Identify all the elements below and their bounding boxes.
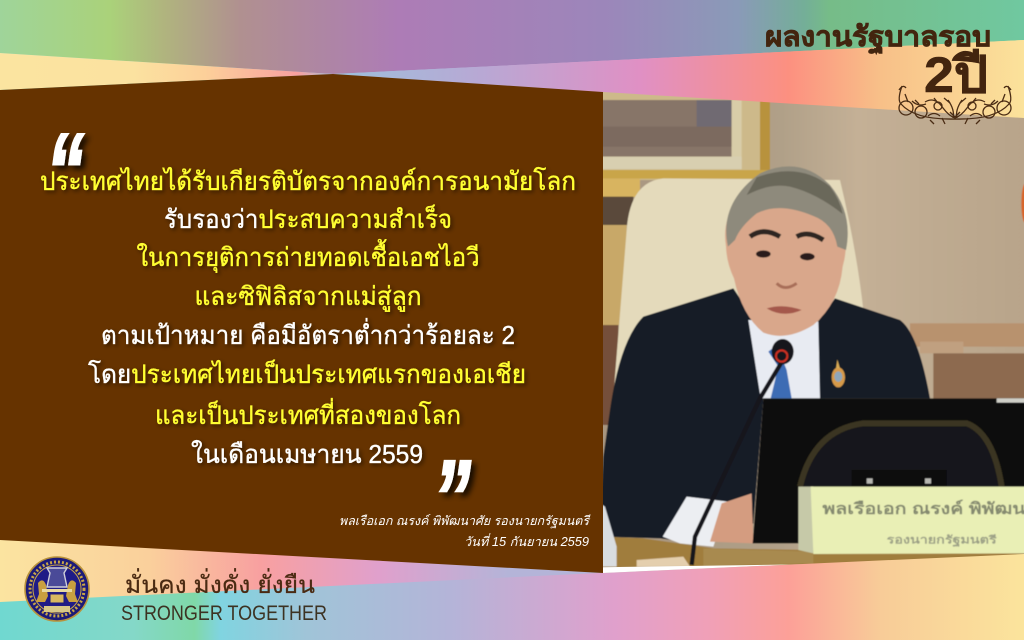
quote text: รับรองว่าประสบความสำเร็จ [164, 204, 452, 234]
quote text: และซิฟิลิสจากแม่สู่ลูก [194, 283, 422, 312]
wall [600, 90, 1024, 577]
suit [600, 288, 930, 543]
slogan english: STRONGER TOGETHER [121, 602, 327, 625]
eyebrows eyes nose mouth [750, 232, 823, 240]
hand and cuff [663, 497, 728, 547]
slogan: มั่นคง มั่งคั่ง ยั่งยืน [125, 568, 315, 599]
slogan [121, 568, 327, 625]
quote text: ประเทศไทยได้รับเกียรติบัตรจากองค์การอนามัยโลก [40, 167, 576, 196]
white photo edge [603, 564, 800, 573]
wooden cabinet [910, 323, 1024, 347]
closing quotation mark: ” [433, 437, 471, 558]
name plate [798, 487, 1024, 554]
quote text: และเป็นประเทศที่สองของโลก [155, 398, 461, 430]
photo: deputy prime minister at a desk [600, 90, 1024, 580]
quote text: ตามเป้าหมาย คือมีอัตราต่ำกว่าร้อยละ 2 [101, 318, 515, 350]
desk [600, 537, 1024, 567]
opening quotation mark: “ [46, 110, 84, 231]
flag hint [1021, 183, 1024, 223]
shirt [748, 320, 820, 398]
attribution: วันที่ 15 กันยายน 2559 [464, 533, 589, 549]
ornament: scrollwork flourish [899, 86, 1011, 124]
monitor [753, 398, 1024, 543]
quote text: ในการยุติการถ่ายทอดเชื้อเอชไอวี [136, 239, 480, 273]
quote text [40, 167, 576, 469]
hair [726, 166, 848, 250]
name plate: รองนายกรัฐมนตรี [887, 533, 997, 547]
attribution [339, 514, 591, 549]
quote text: โดยประเทศไทยเป็นประเทศแรกของเอเชีย [88, 359, 526, 389]
microphone [692, 339, 794, 565]
attribution: พลเรือเอก ณรงค์ พิพัฒนาศัย รองนายกรัฐมนตรี [339, 514, 591, 529]
lapel pin [832, 359, 845, 387]
heading: government results: ผลงานรัฐบาลรอบ [765, 21, 991, 55]
head [725, 193, 846, 336]
heading: 2 years: 2ปี [924, 47, 988, 103]
quote text: ในเดือนเมษายน 2559 [191, 440, 423, 469]
name plate: พลเรือเอก ณรงค์ พิพัฒน [822, 499, 1024, 518]
panel: brown quote panel [0, 74, 603, 573]
chair [614, 178, 864, 386]
framed painting [600, 90, 770, 180]
logo: government seal [25, 557, 89, 621]
tie [768, 345, 792, 398]
heading: government results [765, 21, 991, 103]
